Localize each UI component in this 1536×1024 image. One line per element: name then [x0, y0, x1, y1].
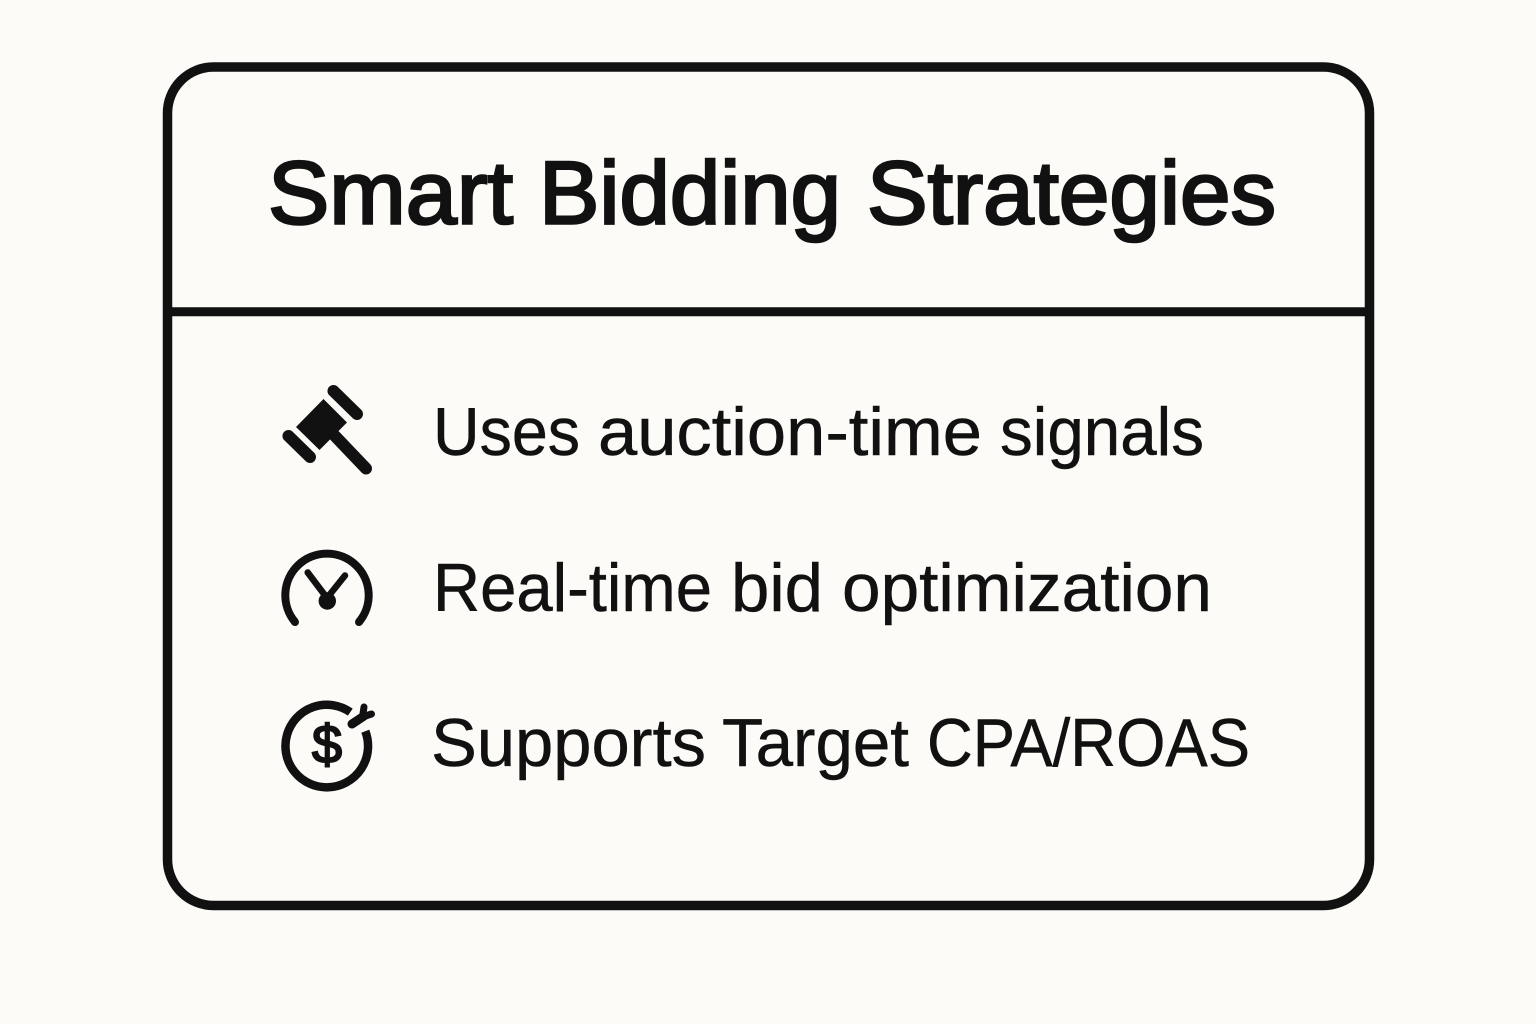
text: auction-time signals: auction-time [598, 394, 982, 470]
icon: dollar target with dart: $ [312, 715, 342, 775]
text: auction-time signals: signals [1000, 394, 1204, 470]
text: auction-time signals: Uses [433, 394, 580, 470]
panel: smart bidding card [167, 67, 1370, 906]
text: target cpa roas: Supports [431, 705, 706, 781]
text: target cpa roas: CPA/ROAS [927, 705, 1250, 781]
text: real-time bid optimization: optimization [842, 550, 1212, 626]
title: Strategies [867, 142, 1276, 242]
title: Bidding [539, 142, 841, 242]
title [268, 142, 1276, 242]
icon: dollar target with dart [285, 705, 372, 787]
text: target cpa roas [431, 705, 1250, 781]
icon: speedometer gauge [285, 554, 369, 622]
text: real-time bid optimization: Real-time [433, 550, 712, 626]
icon: gavel [288, 391, 366, 468]
text: auction-time signals [433, 394, 1204, 470]
text: real-time bid optimization [433, 550, 1212, 626]
title: Smart [268, 142, 513, 242]
text: target cpa roas: Target [722, 705, 909, 781]
text: real-time bid optimization: bid [731, 550, 823, 626]
